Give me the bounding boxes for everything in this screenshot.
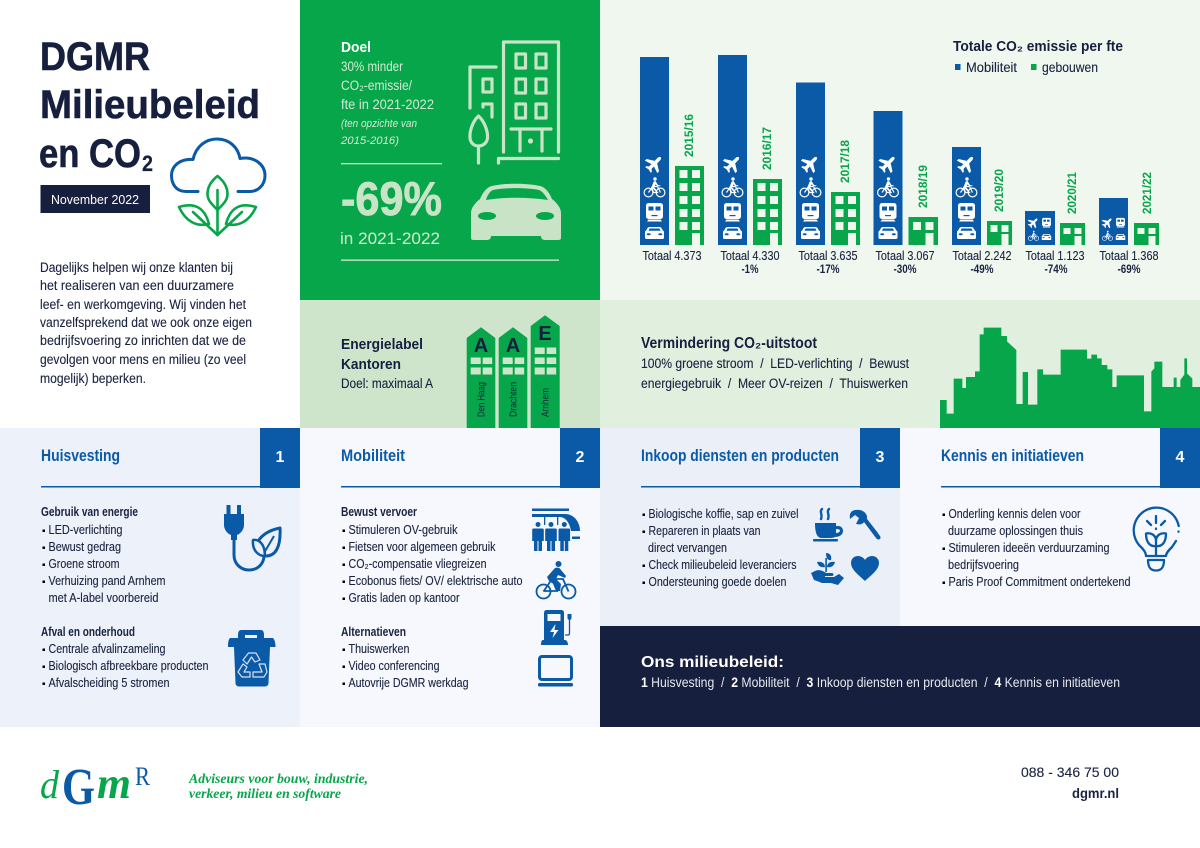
bars 2020/21: -74% xyxy=(1044,262,1068,276)
list: bewust vervoer: Ecobonus fiets/ OV/ elektrische auto xyxy=(348,573,522,588)
huisvesting header xyxy=(41,428,300,488)
doel text: fte in 2021-2022 xyxy=(341,97,434,112)
bars 2019/20 xyxy=(952,147,1012,276)
list: bewust vervoer: Stimuleren OV-gebruik xyxy=(348,522,458,537)
intro text: gevolgen voor mens en milieu (zo veel xyxy=(40,352,246,367)
intro text: mogelijk) beperken. xyxy=(40,371,146,386)
bars 2020/21 xyxy=(1025,171,1085,276)
bars 2016/17: 2016/17 xyxy=(762,127,774,170)
building: Den Haag: A xyxy=(474,335,488,357)
result: in 2021-2022 xyxy=(340,229,440,248)
list: gebruik van energie: LED-verlichting xyxy=(48,522,122,537)
title: en CO xyxy=(39,132,141,176)
bars 2019/20: -49% xyxy=(970,262,994,276)
logo: dGmR: d xyxy=(40,762,60,807)
bars 2015/16: 2015/16 xyxy=(684,114,696,157)
doel text: CO₂-emissie/ xyxy=(341,78,412,93)
building: Den Haag: Den Haag xyxy=(476,382,488,417)
panel: huisvesting xyxy=(41,428,300,690)
doel text: Doel xyxy=(341,40,371,56)
list: gebruik van energie: Bewust gedrag xyxy=(48,539,121,554)
list: afval en onderhoud: Afvalscheiding 5 stromen xyxy=(48,675,170,690)
list: gebruik van energie: met A-label voorbereid xyxy=(48,590,158,605)
vermindering text: Vermindering CO₂-uitstoot xyxy=(641,335,817,352)
icon: heart xyxy=(851,556,879,581)
icon: wrench xyxy=(850,510,881,539)
chart title: Totale CO₂ emissie per fte xyxy=(953,39,1123,55)
bars 2019/20: Totaal 2.242 xyxy=(952,249,1012,263)
panel: kennis xyxy=(941,428,1200,589)
panel: ons milieubeleid xyxy=(641,654,1120,690)
list: kennis: Onderling kennis delen voor xyxy=(948,506,1081,521)
intro text: het realiseren van een duurzamere xyxy=(40,278,234,293)
kennis header xyxy=(941,428,1200,488)
bars 2021/22 xyxy=(1099,172,1159,276)
bars 2021/22: Totaal 1.368 xyxy=(1100,249,1159,263)
list: kennis: bedrijfsvoering xyxy=(948,557,1019,572)
list: kennis xyxy=(942,506,1130,589)
icon: cyclist xyxy=(536,561,576,598)
bars 2021/22: -69% xyxy=(1118,262,1141,276)
bars 2016/17: Totaal 4.330 xyxy=(720,249,780,263)
mobiliteit header: 2 xyxy=(576,449,585,466)
list: inkoop: Check milieubeleid leveranciers xyxy=(648,557,797,572)
title: 2 xyxy=(142,151,153,176)
list: inkoop: Ondersteuning goede doelen xyxy=(648,574,786,589)
kennis header: Kennis en initiatieven xyxy=(941,447,1084,465)
doel text: 2015-2016) xyxy=(340,135,399,147)
panel: doel xyxy=(340,40,561,261)
icon: buildings and tree xyxy=(470,42,558,163)
bars 2017/18: -17% xyxy=(816,262,840,276)
title: Milieubeleid xyxy=(40,83,260,127)
title xyxy=(39,35,260,176)
legend xyxy=(955,60,1098,75)
icon: commuters at train xyxy=(532,508,580,551)
contact: 088 - 346 75 00 xyxy=(1021,764,1119,780)
result xyxy=(340,172,559,261)
bars 2021/22: 2021/22 xyxy=(1142,172,1154,214)
building: Drachten xyxy=(499,327,527,428)
bars 2015/16 xyxy=(640,57,704,263)
building: Arnhem xyxy=(531,315,560,428)
list: bewust vervoer: Gratis laden op kantoor xyxy=(348,590,460,605)
icon: laptop xyxy=(538,656,573,686)
panel: vermindering xyxy=(641,328,1200,428)
building: Drachten: A xyxy=(506,335,520,357)
list: bewust vervoer: CO₂-compensatie vliegreizen xyxy=(348,556,486,571)
list: gebruik van energie: Groene stroom xyxy=(48,556,120,571)
tagline: Adviseurs voor bouw, industrie, xyxy=(188,772,368,787)
list: inkoop: direct vervangen xyxy=(648,540,727,555)
icon: light bulb with plant xyxy=(1134,508,1179,570)
mobiliteit header xyxy=(341,428,600,488)
energielabel text: Kantoren xyxy=(341,356,401,373)
contact xyxy=(1021,764,1119,801)
list: inkoop: Biologische koffie, sap en zuivel xyxy=(648,506,799,521)
legend: Mobiliteit xyxy=(966,60,1017,75)
energielabel text xyxy=(341,336,433,391)
vermindering text: energiegebruik / Meer OV-reizen / Thuiswerken xyxy=(641,376,908,391)
vermindering text: 100% groene stroom / LED-verlichting / Bewust xyxy=(641,356,909,371)
list: kennis: duurzame oplossingen thuis xyxy=(948,523,1083,538)
bars 2017/18: Totaal 3.635 xyxy=(798,249,858,263)
list: gebruik van energie: Gebruik van energie xyxy=(41,504,138,519)
list: kennis: Paris Proof Commitment ondertekend xyxy=(948,574,1130,589)
panel: ons milieubeleid: Ons milieubeleid: xyxy=(641,654,784,671)
intro text: bedrijfsvoering zo inrichten dat we de xyxy=(40,333,246,348)
doel text: 30% minder xyxy=(341,59,403,74)
panel: chart xyxy=(640,39,1159,276)
icon: charging station xyxy=(541,610,572,645)
panel: inkoop xyxy=(641,428,900,589)
logo: dGmR: m xyxy=(97,759,131,808)
list: alternatieven xyxy=(341,624,468,690)
bars 2018/19: 2018/19 xyxy=(918,165,930,208)
panel: energielabel xyxy=(341,315,560,428)
icon: car xyxy=(471,184,561,240)
inkoop header: 3 xyxy=(876,449,885,466)
list: afval en onderhoud: Afval en onderhoud xyxy=(41,624,135,639)
bars 2020/21: 2020/21 xyxy=(1067,171,1079,214)
list: afval en onderhoud: Centrale afvalinzameling xyxy=(48,641,166,656)
bars 2015/16: Totaal 4.373 xyxy=(642,249,702,263)
title: DGMR xyxy=(40,35,150,79)
building: Drachten: Drachten xyxy=(508,382,520,417)
list: afval en onderhoud: Biologisch afbreekbare producten xyxy=(48,658,208,673)
intro text xyxy=(40,260,252,386)
list: bewust vervoer: Bewust vervoer xyxy=(341,504,417,519)
list: bewust vervoer xyxy=(341,504,522,605)
bars 2020/21: Totaal 1.123 xyxy=(1026,249,1085,263)
huisvesting header: 1 xyxy=(276,449,285,466)
logo: dGmR: G xyxy=(62,759,95,816)
building: Arnhem: Arnhem xyxy=(540,388,552,417)
bars 2017/18: 2017/18 xyxy=(840,139,852,183)
bars 2016/17: -1% xyxy=(742,262,759,276)
energielabel text: Doel: maximaal A xyxy=(341,376,433,391)
list: gebruik van energie: Verhuizing pand Arnhem xyxy=(48,573,166,588)
mobiliteit header: Mobiliteit xyxy=(341,447,405,465)
legend: gebouwen xyxy=(1042,60,1098,75)
inkoop header: Inkoop diensten en producten xyxy=(641,447,839,465)
list: inkoop: Repareren in plaats van xyxy=(648,523,760,538)
list: alternatieven: Autovrije DGMR werkdag xyxy=(348,675,468,690)
bars 2018/19 xyxy=(874,111,938,276)
building: Den Haag xyxy=(467,327,495,428)
list: kennis: Stimuleren ideeën verduurzaming xyxy=(948,540,1110,555)
doel text xyxy=(340,40,442,164)
contact: dgmr.nl xyxy=(1072,785,1119,801)
panel: ons milieubeleid: 1 Huisvesting / 2 Mobiliteit / 3 Inkoop diensten en producten / 4 Kennis en initiatieven xyxy=(641,675,1120,690)
list: afval en onderhoud xyxy=(41,624,208,690)
icon: hand with plant xyxy=(811,553,844,585)
panel: mobiliteit xyxy=(341,428,600,690)
list: alternatieven: Thuiswerken xyxy=(348,641,410,656)
doel text: (ten opzichte van xyxy=(341,118,417,130)
list: gebruik van energie xyxy=(41,504,166,605)
list: alternatieven: Alternatieven xyxy=(341,624,406,639)
date badge: November 2022 xyxy=(51,193,139,207)
bars 2017/18 xyxy=(796,82,860,276)
icon: coffee cup xyxy=(813,509,843,542)
intro text: leef- en werkomgeving. Wij vinden het xyxy=(40,297,246,312)
icon: cloud with plant xyxy=(172,139,265,235)
date badge xyxy=(40,185,150,213)
huisvesting header: Huisvesting xyxy=(41,447,120,465)
bars 2018/19: Totaal 3.067 xyxy=(876,249,935,263)
tagline xyxy=(188,772,368,802)
energielabel text: Energielabel xyxy=(341,336,423,353)
skyline xyxy=(940,328,1200,428)
icon: plug with leaf xyxy=(224,506,280,570)
bars 2019/20: 2019/20 xyxy=(994,169,1006,212)
bars 2018/19: -30% xyxy=(894,262,917,276)
inkoop header xyxy=(641,428,900,488)
bars 2016/17 xyxy=(718,55,782,276)
list: inkoop xyxy=(642,506,799,589)
intro text: Dagelijks helpen wij onze klanten bij xyxy=(40,260,233,275)
vermindering text xyxy=(641,335,909,391)
list: alternatieven: Video conferencing xyxy=(348,658,440,673)
logo: dGmR: R xyxy=(135,762,151,791)
list: bewust vervoer: Fietsen voor algemeen gebruik xyxy=(348,539,496,554)
tagline: verkeer, milieu en software xyxy=(189,787,341,802)
intro text: vanzelfsprekend dat we ook onze eigen xyxy=(40,315,252,330)
result: -69% xyxy=(341,172,442,225)
icon: recycling bin xyxy=(228,630,276,686)
kennis header: 4 xyxy=(1176,449,1185,466)
logo: dGmR xyxy=(40,759,151,816)
building: Arnhem: E xyxy=(538,323,552,345)
